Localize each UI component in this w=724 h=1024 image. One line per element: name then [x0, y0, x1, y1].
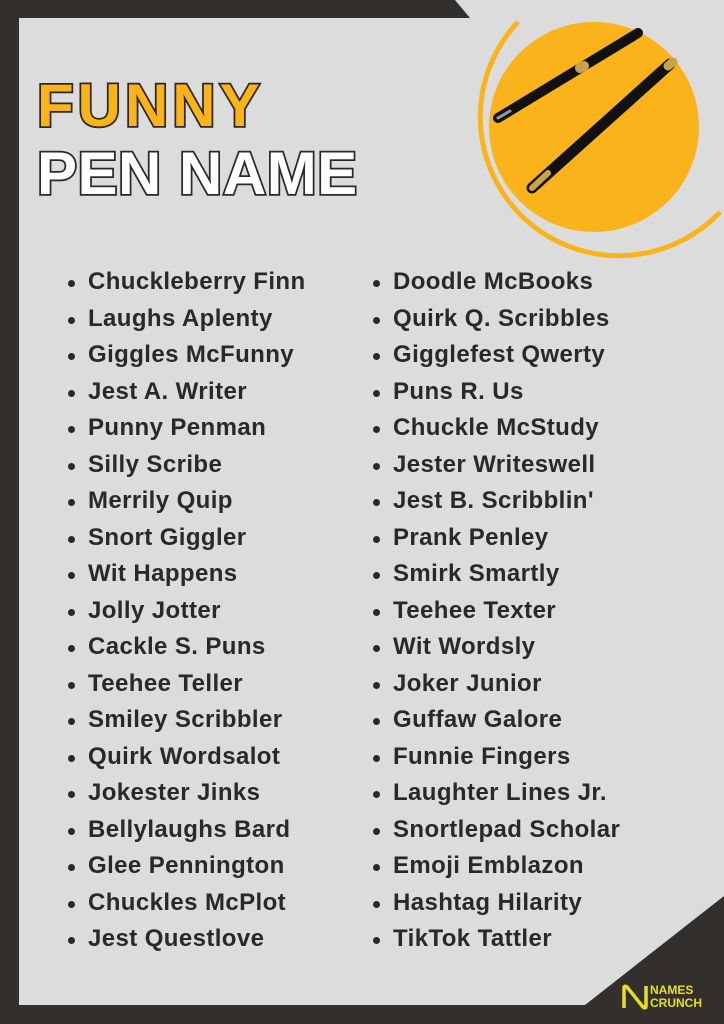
list: column 2: Snortlepad Scholar: [393, 816, 620, 842]
list: column 2: Puns R. Us: [393, 378, 524, 404]
title: FUNNY: [37, 72, 264, 139]
list: column 2: [373, 268, 620, 952]
list: column 1: Jokester Jinks: [88, 779, 260, 806]
logo: Names Crunch: NAMES: [650, 983, 693, 997]
list: column 2: Emoji Emblazon: [393, 852, 584, 879]
top dark band: [19, 0, 470, 18]
list: column 2: Hashtag Hilarity: [393, 888, 582, 916]
title: [37, 72, 358, 207]
list: column 2: Laughter Lines Jr.: [393, 779, 607, 806]
list: column 1: Merrily Quip: [88, 487, 233, 514]
list: column 1: Quirk Wordsalot: [88, 742, 280, 770]
list: column 1: Jest Questlove: [88, 925, 264, 952]
list: column 1: Jolly Jotter: [88, 596, 221, 624]
list: column 2: Smirk Smartly: [393, 560, 560, 587]
list: column 1: Smiley Scribbler: [88, 706, 282, 733]
list: column 2: Jest B. Scribblin': [393, 487, 594, 514]
list: column 2: Guffaw Galore: [393, 706, 562, 733]
list: column 1: Wit Happens: [88, 560, 238, 587]
logo: Names Crunch: [622, 983, 702, 1010]
list: column 1: Giggles McFunny: [88, 341, 294, 368]
icon: pens in yellow circle: [478, 20, 722, 258]
list: column 2: Teehee Texter: [393, 596, 556, 624]
list: column 2: Doodle McBooks: [393, 268, 593, 295]
list: column 1: Laughs Aplenty: [88, 304, 273, 332]
list: column 1: Glee Pennington: [88, 852, 285, 879]
list: column 1: Cackle S. Puns: [88, 633, 266, 660]
list: column 2: TikTok Tattler: [393, 925, 552, 952]
logo: Names Crunch: CRUNCH: [650, 996, 702, 1010]
list: column 1: Snort Giggler: [88, 524, 247, 550]
list: column 1: Silly Scribe: [88, 450, 222, 478]
list: column 1: Chuckleberry Finn: [88, 268, 306, 295]
list: column 1: Chuckles McPlot: [88, 888, 286, 916]
list: column 2: Chuckle McStudy: [393, 414, 599, 441]
list: column 2: Joker Junior: [393, 670, 542, 696]
list: column 2: Funnie Fingers: [393, 742, 571, 770]
list: column 1: Jest A. Writer: [88, 378, 247, 404]
title: PEN NAME: [37, 140, 358, 207]
list: column 1: Punny Penman: [88, 414, 266, 441]
list: column 2: Jester Writeswell: [393, 450, 595, 478]
list: column 2: Prank Penley: [393, 524, 549, 550]
list: column 2: Quirk Q. Scribbles: [393, 304, 610, 332]
list: column 2: Gigglefest Qwerty: [393, 341, 605, 368]
list: column 1: Teehee Teller: [88, 670, 243, 696]
list: column 1: Bellylaughs Bard: [88, 816, 290, 842]
list: column 1: [68, 268, 306, 952]
list: column 2: Wit Wordsly: [393, 633, 535, 660]
